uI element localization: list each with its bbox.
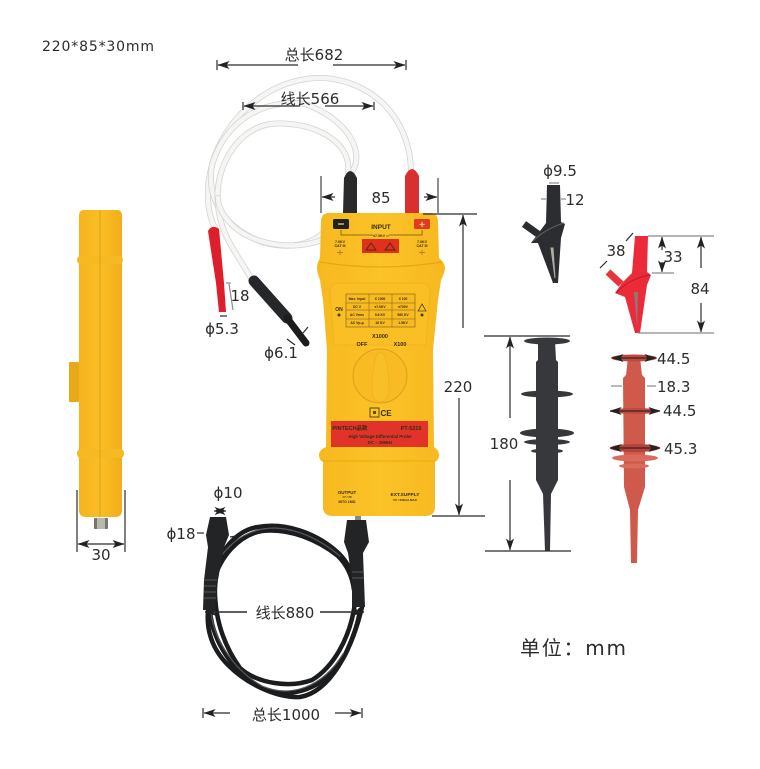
range labels: OFF [356, 342, 368, 348]
minus input socket [333, 219, 349, 229]
plus input socket [414, 219, 430, 231]
dimension: total length 1000: 总长1000 [252, 706, 320, 724]
input rating line [341, 230, 422, 238]
dimension: clip 9.5: ϕ9.5 [543, 162, 577, 180]
dimension: plug tip 18 [226, 283, 250, 310]
specification table: AC Vp-p [350, 321, 364, 325]
dimension: clip 38: 38 [606, 242, 626, 260]
right CAT rating [416, 240, 428, 255]
specification table: 560 KV [397, 313, 409, 317]
dimension: clip 84 [638, 237, 714, 333]
dimension: clip 84: 84 [690, 280, 710, 298]
right CAT rating: CAT III [416, 244, 428, 248]
left CAT rating [334, 240, 346, 255]
dimension: hook 44.5 top [612, 350, 690, 368]
red model label: PT-5215 [401, 426, 421, 432]
range labels [356, 334, 406, 348]
specification table: ±700V [398, 305, 409, 309]
output label [338, 490, 356, 504]
dimension: hook 18.3: 18.3 [657, 378, 690, 396]
red banana plug [208, 227, 226, 312]
warning indicator [418, 304, 426, 316]
output label: INTO 1MΩ [339, 500, 356, 504]
dimension: connector diameter 10 [214, 484, 242, 511]
left CAT rating: 7.0KV [335, 240, 346, 244]
dimension: hook 45.3 [610, 440, 697, 458]
red model label: PINTECH品致 [332, 424, 368, 432]
probe main body [317, 213, 445, 516]
red alligator clip [608, 236, 651, 333]
dimension: connector diameter 18: ϕ18 [167, 525, 195, 543]
red model label [331, 421, 428, 447]
dimension: hook 44.5 middle: 44.5 [663, 402, 696, 420]
dimension: clip 12: 12 [565, 191, 585, 209]
certification marks: CE [380, 409, 392, 418]
specification table [346, 294, 415, 327]
dimension: plug diameter 6.1 [264, 327, 308, 362]
range labels: X100 [394, 342, 406, 348]
specification table: ±7.0KV [374, 305, 386, 309]
specification table: DC V [353, 305, 362, 309]
red warning panel [362, 239, 399, 253]
dimension: hook 18.3 [611, 378, 690, 396]
input label: INPUT [371, 224, 391, 231]
dimension: connector diameter 18 [167, 525, 236, 543]
black coaxial cable [208, 526, 362, 697]
left cable connector [203, 517, 229, 610]
dimension: wire length 566: 线长566 [281, 90, 339, 108]
output label: ±7 / 70 [342, 495, 352, 499]
dimension: width 30: 30 [91, 546, 111, 564]
dimension: width 85: 85 [371, 189, 391, 207]
white test lead wires [208, 78, 411, 280]
dimension: clip 33 [648, 236, 714, 273]
size caption: 220*85*30mm [42, 39, 154, 55]
range labels: X1000 [372, 334, 388, 340]
dimension: hook 45.3: 45.3 [664, 440, 697, 458]
dimension: clip 33: 33 [663, 248, 683, 266]
dimension: length 220: 220 [444, 378, 472, 396]
red plug on probe [405, 169, 419, 213]
dimension: cable length 880: 线长880 [256, 604, 314, 622]
dimension: hook 44.5 middle [610, 402, 696, 420]
black banana plug [254, 281, 306, 343]
dimension: width 30 [77, 490, 125, 564]
dimension: total length 682: 总长682 [285, 46, 343, 64]
dimension: plug tip 18: 18 [230, 287, 250, 305]
range knob [353, 349, 407, 403]
black plug on probe [343, 171, 357, 213]
plus input socket: + [419, 220, 425, 231]
ON indicator [335, 307, 343, 316]
dimension: plug diameter 5.3: ϕ5.3 [205, 320, 239, 338]
dimension: clip 38 [600, 233, 633, 268]
right CAT rating: 7.0KV [417, 240, 428, 244]
red model label: High Voltage Differential Probe [349, 434, 412, 439]
certification marks [370, 408, 392, 418]
specification table: 1.5KV [398, 321, 408, 325]
output label: OUTPUT [338, 490, 356, 495]
dimension: connector diameter 10: ϕ10 [214, 484, 242, 502]
specification table: X 1000 [375, 297, 385, 301]
ON indicator: ON [335, 307, 343, 313]
red test hook [610, 354, 660, 563]
specification table: X 100 [399, 297, 408, 301]
input rating line: ±7.0KV ⎓ [373, 234, 389, 238]
external supply label: 5V / 200mA MAX [393, 498, 417, 502]
specification table: 16 KV [375, 321, 385, 325]
specification table: Max. Input [349, 297, 366, 301]
right cable connector [344, 516, 369, 607]
dimension: wire length 566 [243, 90, 374, 110]
specification table: 5.6 KV [375, 313, 386, 317]
left CAT rating: CAT III [334, 244, 346, 248]
external supply label [391, 492, 420, 502]
unit note: 单位：mm [520, 636, 626, 660]
side view of probe [69, 210, 124, 529]
dimension: width 85 [321, 176, 438, 213]
red model label: DC ~ 25MHz [368, 440, 392, 445]
dimension: hook 44.5 top: 44.5 [657, 350, 690, 368]
black alligator clip [524, 185, 565, 283]
black test hook [520, 338, 574, 551]
dimension: plug diameter 6.1: ϕ6.1 [264, 344, 298, 362]
dimension: hook length 180: 180 [490, 435, 518, 453]
dimension: clip 12 [541, 191, 585, 209]
external supply label: EXT.SUPPLY [391, 492, 420, 498]
specification table: AC Vrms [350, 313, 364, 317]
